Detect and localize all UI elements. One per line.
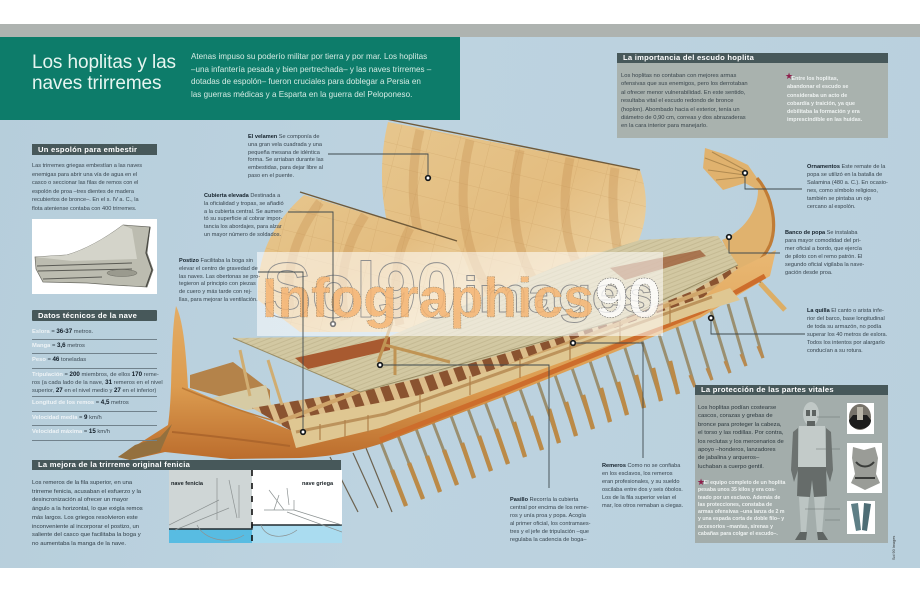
title	[32, 52, 176, 94]
text block: inconveniente al incorporar el postizo, un	[32, 524, 139, 530]
callout: banco de popa	[785, 230, 864, 276]
heading: La importancia del escudo hoplita	[623, 53, 754, 62]
callout: la quilla: rior del barco, base longitudinal	[807, 316, 885, 322]
panel: un espolón para embestir	[32, 144, 157, 294]
text block: flota ateniense contaba con 400 trirremes.	[32, 206, 136, 212]
oars	[330, 267, 785, 512]
text block: Los hoplitas podían costearse	[698, 405, 776, 411]
text block: diámetro de 0,90 cm, correas y dos abrazaderas	[621, 115, 746, 121]
data rows: Tripulación = 200 miembros, de ellos 170 reme-	[32, 371, 159, 378]
watermark	[257, 246, 663, 336]
callout: pasillo: central por encima de los reme-	[510, 505, 589, 511]
callout: ornamentos: popa se utilizó en la batalla de	[807, 172, 882, 178]
title: Los hoplitas y las	[32, 52, 176, 73]
heading: Datos técnicos de la nave	[38, 311, 137, 320]
text block: cascos, corazas y grebas de	[698, 413, 773, 419]
illustration: bronze ram	[32, 219, 157, 294]
callout: banco de popa: para mayor comodidad del pri-	[785, 238, 861, 244]
heading	[32, 144, 157, 155]
heading: Un espolón para embestir	[38, 145, 137, 154]
raised deck	[233, 236, 738, 405]
heading	[617, 53, 888, 63]
callout: postizo: las naves. Las obertonas se pro-	[179, 274, 260, 280]
text block	[32, 163, 142, 212]
callout: la quilla: de toda su armazón, no podía	[807, 324, 881, 330]
text block: luchaban a cuerpo gentil.	[698, 464, 764, 470]
diagram: oar comparison	[169, 470, 342, 543]
text block: side note: cabañas para colgar el escudo–.	[698, 531, 778, 537]
callout: cubierta elevada: un mayor número de soldados.	[204, 232, 281, 238]
callout: el velamen: El velamen Se componía de	[248, 134, 320, 140]
data rows: ros (a cada lado de la nave, 31 remeros en el nivel	[32, 379, 163, 386]
data rows: Velocidad media = 9 km/h	[32, 414, 102, 421]
text block: side note: las protecciones, constaba de	[698, 502, 772, 508]
text block: ofensivas que sus enemigos, pero los derrotaban	[621, 81, 748, 87]
text block: side note	[787, 76, 862, 123]
panel: la protección de las partes vitales	[695, 385, 888, 543]
text block: apoyo –honderos, lanzadores	[698, 447, 776, 453]
figure silhouette	[791, 402, 840, 540]
text block: desincronización al ofrecer un mayor	[32, 497, 128, 503]
text block: casco o seccionar las filas de remos con el	[32, 180, 138, 186]
icon: star: ★	[697, 477, 705, 487]
text block	[32, 480, 143, 547]
callout: remeros: Los de la fila superior veían el	[602, 495, 676, 501]
text block: side note: consideraba un acto de	[787, 93, 847, 99]
data rows: Longitud de los remos = 4,5 metros	[32, 399, 129, 406]
text block: más largos. Los griegos resolvieron este	[32, 515, 138, 521]
label: nave fenicia: nave fenicia	[171, 481, 204, 487]
heading	[32, 310, 157, 321]
callout: remeros	[602, 463, 683, 509]
watermark: 90	[595, 266, 661, 329]
callout: el velamen: una gran vela cuadrada y una	[248, 142, 322, 148]
callout: remeros: Remeros Como no se confiaba	[602, 463, 680, 469]
text block: Los hoplitas no contaban con mejores armas	[621, 73, 736, 79]
callout: cubierta elevada	[204, 193, 284, 238]
text block: bronce para proteger la cabeza,	[698, 422, 782, 428]
callout: pasillo	[510, 497, 591, 543]
intro text	[191, 52, 432, 99]
data rows: Velocidad máxima = 15 km/h	[32, 428, 110, 435]
text block: resultaba vital el escudo redondo de bronce	[621, 98, 733, 104]
intro text: dotadas de espolón– fueron cruciales para doblegar a Persia en	[191, 77, 421, 86]
mizzen sail	[258, 192, 480, 332]
callout: el velamen: embestidas, para dejar libre al	[248, 165, 323, 171]
text block: side note: armas ofensivas –una lanza de 2 m	[698, 509, 784, 515]
text block: enemigas para abrir una vía de agua en el	[32, 172, 137, 178]
intro text: Atenas impuso su poderío militar por tierra y por mar. Los hoplitas	[191, 52, 427, 61]
data rows: superior, 27 en el nivel medio y 27 en el inferior)	[32, 387, 156, 394]
credit text: Sol 90 Images	[892, 536, 896, 560]
text block: al ofrecer menor vulnerabilidad. En este sentido,	[621, 90, 745, 96]
intro text: –una infantería pesada y bien pertrechada– y las naves trirremes –	[191, 65, 431, 74]
text block: en la cara interior para manejarlo.	[621, 123, 708, 129]
text block: side note: abandonar el escudo se	[787, 84, 848, 90]
callout: remeros: mar, los otros remaban a ciegas.	[602, 503, 683, 509]
callout: el velamen: paso en el puente.	[248, 173, 294, 179]
text block: no aumentaba la manga de la nave.	[32, 541, 126, 547]
callout: banco de popa: segundo oficial vigilaba la nave-	[785, 262, 864, 268]
callout: ornamentos: también se pintaba un ojo	[807, 196, 871, 202]
callout: postizo: tegieron al principio con piezas	[179, 281, 256, 287]
text block: side note	[698, 480, 786, 537]
callout: ornamentos	[807, 164, 888, 210]
text block: side note: El equipo completo de un hoplita	[704, 480, 785, 486]
data rows	[32, 328, 163, 441]
callout: cubierta elevada: la oficialidad y tropas, se añadió	[204, 201, 284, 207]
text block: side note: teado por un esclavo. Además de	[698, 494, 780, 500]
data rows: Manga = 3,6 metros	[32, 342, 85, 349]
callout: postizo: Postizo Facilitaba la boga sin	[179, 258, 253, 264]
text block: (hoplon). Abombado hacia el exterior, tenía un	[621, 107, 740, 113]
heading	[32, 460, 341, 470]
callout: postizo	[179, 258, 260, 303]
callout: ornamentos: cercano al espolón.	[807, 204, 856, 210]
callout: remeros: oscilaba entre dos y seis óbolos.	[602, 487, 683, 493]
callout: ornamentos: Ornamentos Este remate de la	[807, 164, 885, 170]
callout: remeros: eran profesionales, y su sueldo	[602, 479, 679, 485]
helmet	[847, 403, 874, 434]
callout: banco de popa: gación desde proa.	[785, 270, 833, 276]
callout: pasillo: Pasillo Recorría la cubierta	[510, 497, 578, 503]
callout: pasillo: regulaba la cadencia de boga–	[510, 537, 587, 543]
callout: el velamen: pequeña mesana de idéntica	[248, 150, 320, 156]
icon: star: ★	[785, 71, 793, 81]
text block	[698, 405, 784, 470]
illustration: hoplite figure and armour	[791, 402, 882, 540]
callout: remeros: en los esclavos, los remeros	[602, 471, 673, 477]
text block	[621, 73, 748, 129]
callout: ornamentos: Salamina (480 a. C.). En ocasio-	[807, 180, 888, 186]
callout: cubierta elevada: tó su superficie al cobrar impor-	[204, 216, 282, 222]
text block: side note: pesaba unos 35 kilos y era cos-	[698, 487, 776, 493]
stern post and ornament	[703, 148, 774, 272]
cuirass	[847, 443, 882, 493]
callout: banco de popa: mer oficial a bordo, que ejercía	[785, 246, 862, 252]
text block: trirreme fenicia, acusaban el esfuerzo y la	[32, 489, 141, 495]
rib gallery and outrigger	[252, 255, 740, 448]
callout dots	[301, 171, 747, 434]
text block: el torso y las rodillas. Por contra,	[698, 430, 783, 436]
text block: de jabalina y arqueros–	[698, 455, 759, 461]
panel: datos técnicos	[32, 310, 163, 441]
watermark: Infographics	[262, 266, 594, 329]
callout: pasillo: tres y el jefe de tripulación –que	[510, 529, 589, 535]
callout: la quilla: La quilla El canto o arista infe-	[807, 308, 884, 314]
text block: side note: Entre los hoplitas,	[791, 76, 838, 82]
text block: side note: imprescindible en las huidas.	[787, 117, 862, 123]
text block: recubiertos de bronce–. En el s. IV a. C., la	[32, 197, 139, 203]
text block: saliente del casco que facilitaba la boga y	[32, 532, 141, 538]
callout: la quilla: conducían a su rotura.	[807, 348, 863, 354]
text block: Las trirremes griegas embestían a las naves	[32, 163, 142, 169]
callout leader lines	[258, 154, 805, 488]
callout: pasillo: al primer oficial, los contramaes-	[510, 521, 591, 527]
callout: la quilla: superar los 40 metros de eslora.	[807, 332, 887, 338]
watermark: images	[463, 267, 653, 323]
callout: cubierta elevada: Cubierta elevada Destinada a	[204, 193, 280, 199]
top grey band	[0, 24, 920, 37]
callout: postizo: llas, para mejorar la ventilación.	[179, 297, 258, 303]
data rows: Peso = 46 toneladas	[32, 356, 86, 363]
callout: pasillo: ros y unía proa y popa. Acogía	[510, 513, 586, 519]
callout: ornamentos: nes, como símbolo religioso,	[807, 188, 878, 194]
watermark: Sol90	[263, 246, 457, 334]
data rows: Eslora = 36-37 metros.	[32, 328, 93, 335]
panel: la importancia del escudo hoplita	[617, 53, 888, 138]
callout: banco de popa: de piloto con el remo patrón. El	[785, 254, 862, 260]
callout: postizo: elevar el centro de gravedad de	[179, 266, 258, 272]
callout: la quilla: Todos los intentos por alargarlo	[807, 340, 885, 346]
callout: cubierta elevada: tancia los abordajes, para alzar	[204, 224, 282, 230]
title banner	[0, 37, 460, 120]
callout: cubierta elevada: a la cubierta central. Se aumen-	[204, 209, 283, 215]
hull	[118, 250, 776, 460]
callout: el velamen	[248, 134, 324, 179]
callout: la quilla	[807, 308, 887, 354]
label: nave griega: nave griega	[302, 481, 334, 487]
text block: ángulo a la horizontal, lo que exigía remos	[32, 506, 143, 512]
intro text: las guerras médicas y a Esparta en la guerra del Peloponeso.	[191, 90, 412, 99]
callout: banco de popa: Banco de popa Se instalaba	[785, 230, 857, 236]
title: naves trirremes	[32, 73, 161, 94]
text block: Los remeros de la fila superior, en una	[32, 480, 132, 486]
text block: side note: y una espada corta de doble filo– y	[698, 516, 784, 522]
text block: side note: accesorios –mantas, sirenas y	[698, 524, 773, 530]
text block: espolón de proa –tres dientes de madera	[32, 189, 134, 195]
text block: side note: cobardía y traición, ya que	[787, 101, 855, 107]
greaves	[847, 501, 875, 534]
heading	[695, 385, 888, 395]
main sail	[382, 119, 646, 312]
panel: la mejora de la trirreme	[32, 460, 342, 547]
callout: el velamen: forma. Se arriaban durante las	[248, 157, 324, 163]
text block: los reclutas y los mercenarios de	[698, 439, 784, 445]
heading: La mejora de la trirreme original fenicia	[38, 460, 190, 469]
callout: postizo: de cuero y más tarde con rej-	[179, 289, 252, 295]
heading: La protección de las partes vitales	[701, 385, 834, 394]
text block: side note: debilitaba la formación y era	[787, 109, 860, 115]
